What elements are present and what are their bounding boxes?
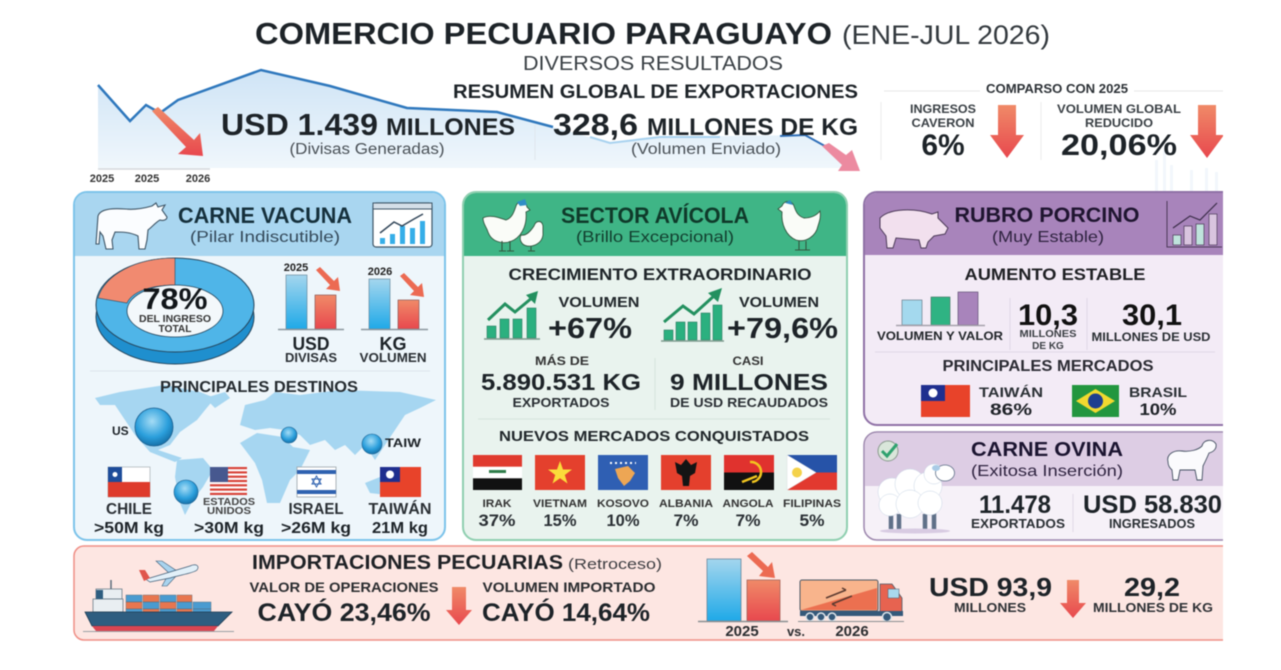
stat: ingresos (910, 104, 976, 156)
market: Angola (722, 498, 774, 530)
market: Vietnam (533, 498, 587, 530)
donut chart 78%: TOTAL (158, 324, 192, 335)
label: Israel (281, 501, 351, 537)
label: Taiwan (368, 501, 432, 537)
stat: volumen +79,6%: VOLUMEN (739, 295, 819, 311)
market: Angola: 7% (736, 511, 760, 530)
heading: crecimiento: CRECIMIENTO EXTRAORDINARIO (508, 265, 812, 284)
icon: pig (880, 210, 948, 248)
stat: 10,3 millones de kg: 10,3 (1018, 299, 1078, 332)
stat: exportados: EXPORTADOS (971, 517, 1065, 531)
stat: divisas: USD 1.439 (221, 107, 378, 142)
stat: exportados: 11.478 (979, 491, 1051, 519)
stat: 10,3 millones de kg: DE KG (1032, 341, 1064, 352)
stat: 9 millones: 9 MILLONES (670, 369, 828, 395)
stat: ingresados: INGRESADOS (1109, 517, 1195, 531)
title: (ENE-JUL 2026) (842, 20, 1050, 50)
title (256, 22, 1049, 50)
market: Albania: 7% (674, 511, 698, 530)
heading: sector avicola: SECTOR AVÍCOLA (561, 203, 749, 228)
title: COMERCIO PECUARIO PARAGUAYO (255, 16, 832, 51)
market: Irak: IRAK (482, 498, 512, 510)
arrow: stat down (1060, 580, 1086, 618)
market: Irak (478, 498, 516, 530)
bar chart: usd divisas: DIVISAS (285, 351, 337, 365)
stat: volumen +79,6%: +79,6% (727, 313, 838, 345)
market: Filipinas: 5% (800, 511, 824, 530)
subheading: (Pilar Indiscutible) (190, 229, 340, 246)
donut chart 78%: 78% (142, 283, 208, 316)
market: Brasil (1129, 384, 1187, 419)
stat: 30,1 millones de usd: MILLONES DE USD (1092, 330, 1211, 344)
heading: importaciones pecuarias: (Retroceso) (568, 556, 662, 573)
label: Estados Unidos: >30M kg (194, 520, 264, 537)
stat: valor de operaciones: VALOR DE OPERACIONES (250, 579, 438, 595)
panel: sector avicola (463, 192, 847, 540)
stat: volumen +67%: VOLUMEN (558, 295, 640, 311)
stat: 5.890.531 kg: MÁS DE (535, 353, 589, 368)
donut chart 78% (96, 258, 254, 364)
arrow: chart decline left (152, 107, 203, 156)
label: Estados Unidos: ESTADOS (203, 497, 255, 508)
bar chart: 2025 vs 2026: 2025 (725, 623, 759, 640)
market: Kosovo: 10% (606, 511, 640, 530)
stat: usd 93,9 millones: USD 93,9 (929, 572, 1052, 602)
icon: hens left (483, 199, 543, 251)
stat: 9 millones: DE USD RECAUDADOS (670, 395, 828, 410)
stat: divisas: MILLONES (386, 114, 515, 141)
stat: 29,2 millones de kg: MILLONES DE KG (1093, 600, 1213, 615)
icon: growth chart 2 (661, 288, 724, 341)
label: Estados Unidos (194, 497, 264, 537)
icon: plane (139, 561, 198, 586)
stat: divisas (222, 113, 515, 158)
subtitle: DIVERSOS RESULTADOS (523, 53, 783, 75)
stat: volumen (553, 113, 858, 158)
market: Taiwan: TAIWÁN (979, 384, 1043, 400)
map: principales destinos (95, 385, 436, 515)
heading: importaciones pecuarias: IMPORTACIONES PECUARIAS (252, 552, 563, 574)
market: Kosovo (597, 498, 649, 530)
flag: Taiwan (380, 467, 421, 497)
stat: 10,3 millones de kg (1018, 299, 1078, 352)
icon: big sheep (878, 464, 954, 534)
flag: Taiwan (921, 385, 970, 417)
market: Angola: ANGOLA (722, 498, 774, 510)
heading: carne ovina: CARNE OVINA (971, 439, 1123, 461)
stat: volumen global: 20,06% (1061, 129, 1177, 162)
bar chart: kg volumen: KG (380, 334, 406, 354)
label: Taiwan: 21M kg (372, 520, 428, 537)
stat: volumen importado (482, 579, 656, 627)
panel: carne vacuna (74, 192, 445, 540)
panel: carne ovina (864, 432, 1236, 540)
stat: ingresos: INGRESOS (910, 102, 976, 116)
bar chart: volumen y valor: VOLUMEN Y VALOR (877, 329, 1003, 343)
label: Taiwan: TAIWÁN (368, 501, 432, 518)
stat: 30,1 millones de usd (1092, 299, 1211, 344)
stat: 29,2 millones de kg (1093, 572, 1213, 615)
stat: volumen +67% (548, 295, 640, 345)
label: Chile: >50M kg (94, 520, 164, 537)
flag: Irak (473, 455, 522, 490)
label: Estados Unidos: UNIDOS (207, 506, 251, 517)
market: Vietnam: VIETNAM (533, 498, 587, 510)
stat: valor de operaciones: CAYÓ 23,46% (258, 597, 430, 627)
market: Filipinas: FILIPINAS (783, 498, 841, 510)
bar chart: usd divisas (278, 262, 344, 365)
stat: volumen +67%: +67% (548, 313, 632, 345)
stat: volumen global: VOLUMEN GLOBAL (1057, 102, 1181, 116)
arrow: importaciones down (446, 587, 472, 625)
header band (865, 433, 1235, 486)
header band (75, 193, 444, 256)
flag: Filipinas (787, 455, 837, 490)
stat: 5.890.531 kg (481, 353, 641, 410)
bubble: US (135, 408, 173, 446)
stat: 9 millones (670, 354, 828, 410)
heading: nuevos mercados: NUEVOS MERCADOS CONQUISTADOS (499, 428, 809, 445)
flag: Angola (724, 455, 774, 490)
market: Albania: ALBANIA (659, 498, 713, 510)
stat: 30,1 millones de usd: 30,1 (1122, 299, 1182, 332)
panel: rubro porcino (864, 192, 1236, 425)
market: Filipinas (783, 498, 841, 530)
bar chart: 2025 vs 2026 (698, 552, 805, 640)
flag: Israel (297, 467, 336, 497)
header band (865, 193, 1235, 255)
stat: ingresos: CAVERON (912, 116, 974, 130)
chart axis years: 2025 (135, 173, 159, 185)
flag: USA (210, 467, 247, 495)
arrow: chart decline right (822, 143, 860, 171)
stat: ingresos: 6% (921, 129, 965, 162)
stat: ingresados: USD 58.830 (1083, 491, 1222, 519)
market: Vietnam: 15% (544, 511, 576, 530)
chart axis years: 2025 (90, 173, 114, 185)
icon: growth chart (1167, 201, 1222, 247)
area chart background (98, 70, 860, 169)
icon: growth window (373, 203, 432, 247)
flag: Kosovo (598, 455, 648, 490)
heading: rubro porcino: RUBRO PORCINO (954, 204, 1140, 227)
icon: truck (798, 580, 904, 622)
label: Israel: ISRAEL (288, 501, 344, 518)
heading: principales destinos: PRINCIPALES DESTINOS (160, 379, 358, 396)
subheading: (Muy Estable) (992, 229, 1104, 246)
market: Taiwan (979, 384, 1043, 419)
label: Israel: >26M kg (281, 520, 351, 537)
market: Brasil: BRASIL (1129, 384, 1187, 400)
arrow: volumen down (1190, 105, 1224, 158)
stat: volumen importado: CAYÓ 14,64% (482, 597, 650, 627)
icon: container ship (83, 580, 234, 632)
stat: usd 93,9 millones (929, 572, 1052, 615)
map: principales destinos: TAIW (385, 436, 422, 450)
stat: 9 millones: CASI (732, 354, 764, 368)
market: Albania (659, 498, 713, 530)
bar chart: usd divisas: USD (292, 334, 330, 354)
stat: usd 93,9 millones: MILLONES (954, 600, 1026, 615)
map: principales destinos: US (112, 424, 129, 438)
icon: hen right (778, 200, 820, 250)
stat: volumen: (Volumen Enviado) (631, 141, 781, 158)
label: 2026: 2026 (835, 623, 869, 640)
header band (464, 193, 846, 256)
icon: growth chart 1 (484, 291, 540, 339)
stat: 29,2 millones de kg: 29,2 (1124, 572, 1180, 602)
bar chart: volumen y valor (877, 292, 1003, 343)
icon: small sheep (1168, 440, 1216, 480)
stat: valor de operaciones (250, 579, 438, 627)
bar chart: kg volumen (360, 266, 428, 365)
panel: comparado con 2025 (881, 82, 1224, 162)
flag: Chile (108, 467, 150, 497)
stat: divisas: (Divisas Generadas) (290, 141, 444, 158)
stat: 5.890.531 kg: 5.890.531 KG (481, 369, 641, 395)
label: Chile (94, 501, 164, 537)
stat: volumen global: REDUCIDO (1085, 116, 1153, 130)
stat: volumen global (1057, 102, 1181, 162)
heading: principales mercados: PRINCIPALES MERCADOS (942, 358, 1154, 375)
market: Taiwan: 86% (990, 400, 1032, 419)
chart axis years (89, 174, 211, 183)
label: Chile: CHILE (106, 501, 152, 518)
subheading: (Exitosa Inserción) (971, 463, 1123, 480)
panel: importaciones pecuarias (74, 546, 1239, 640)
flag: Albania (661, 455, 711, 490)
bar chart: kg volumen: VOLUMEN (360, 351, 426, 365)
market: Brasil: 10% (1140, 400, 1176, 419)
stat: exportados (971, 491, 1065, 531)
stat: volumen: 328,6 (553, 107, 638, 142)
subheading: (Brillo Excepcional) (576, 229, 734, 246)
stat: 5.890.531 kg: EXPORTADOS (512, 395, 610, 410)
bar chart: usd divisas: 2025 (284, 262, 308, 274)
flag: Brasil (1072, 385, 1119, 417)
heading: resumen global: RESUMEN GLOBAL DE EXPORTACIONES (453, 82, 858, 103)
heading: aumento estable: AUMENTO ESTABLE (964, 265, 1146, 284)
donut chart 78%: DEL INGRESO (139, 314, 211, 325)
icon: check (878, 441, 898, 461)
stat: volumen importado: VOLUMEN IMPORTADO (482, 579, 656, 595)
bar chart: kg volumen: 2026 (368, 266, 392, 278)
market: Kosovo: KOSOVO (597, 498, 649, 510)
heading: carne vacuna: CARNE VACUNA (178, 203, 352, 228)
chart axis years: 2026 (186, 173, 210, 185)
icon: cow (96, 203, 167, 249)
arrow: ingresos down (990, 105, 1024, 158)
comparison heading: COMPARSO CON 2025 (986, 82, 1128, 96)
stat: 10,3 millones de kg: MILLONES (1020, 329, 1077, 340)
stat: ingresados (1083, 491, 1222, 531)
stat: volumen +79,6% (727, 295, 838, 345)
bar chart: 2025 vs 2026: vs. (787, 624, 805, 639)
market: Irak: 37% (478, 511, 516, 530)
flag: Vietnam (535, 455, 585, 490)
stat: volumen: MILLONES DE KG (647, 114, 858, 141)
